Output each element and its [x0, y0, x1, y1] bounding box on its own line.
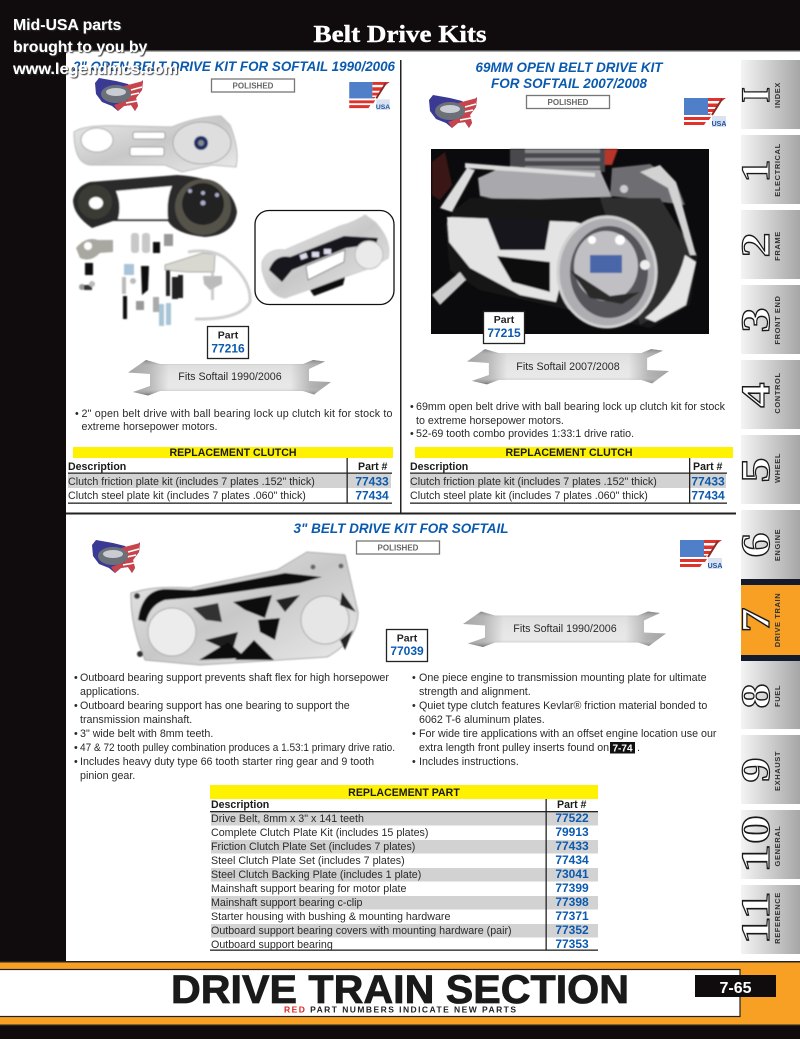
tab: control: 4: [734, 382, 778, 408]
table: replacement clutch: 77434: [355, 488, 389, 502]
panel: 69mm kit: [410, 59, 733, 504]
tab: index: I: [733, 87, 778, 103]
watermark text: [12, 17, 178, 78]
bullet text left: 3" wide belt with 8mm teeth.: [80, 728, 213, 740]
bullet text right: •: [412, 672, 416, 684]
icon: made in usa flag: [684, 98, 726, 128]
bullet text: •: [410, 428, 414, 440]
bullet text right: •: [412, 756, 416, 768]
tab: wheel: WHEEL: [773, 453, 782, 483]
table: replacement part: Outboard support bearing covers with mounting hardware (pair): [211, 925, 512, 937]
table: replacement part: 77399: [555, 881, 589, 895]
icon: usa map: [429, 95, 477, 128]
tab: front end: FRONT END: [773, 295, 782, 345]
footer title: DRIVE TRAIN SECTION: [171, 968, 629, 1012]
bullet text left: applications.: [80, 686, 139, 698]
bullet text left: 47 & 72 tooth pulley combination produces a 1.53:1 primary drive ratio.: [80, 742, 395, 754]
table: replacement part: 77522: [555, 811, 589, 825]
watermark text: brought to you by: [13, 39, 147, 56]
bullet text left: •: [74, 672, 78, 684]
table: replacement clutch: REPLACEMENT CLUTCH: [505, 447, 633, 459]
table: replacement clutch: 77433: [355, 474, 389, 488]
tab: general: GENERAL: [773, 826, 782, 866]
polished label: [356, 541, 440, 554]
table: replacement part: 77352: [555, 923, 589, 937]
tab: exhaust: EXHAUST: [773, 751, 782, 791]
heading: 3 inch kit: 3" BELT DRIVE KIT FOR SOFTAIL: [294, 520, 508, 536]
table: replacement clutch: Part #: [358, 461, 388, 473]
table: replacement part: 77433: [555, 839, 589, 853]
polished label: POLISHED: [378, 544, 419, 552]
table: replacement part: REPLACEMENT PART: [348, 787, 460, 799]
tab: frame: 2: [734, 232, 778, 258]
tab: drive train (active): 7: [734, 607, 778, 633]
table: replacement clutch: Clutch friction plate kit (includes 7 plates .152" thick): [68, 476, 315, 488]
bullet text right: [412, 672, 717, 768]
heading line 2: FOR SOFTAIL 2007/2008: [491, 75, 647, 91]
table: replacement part: Mainshaft support bearing c-clip: [211, 897, 363, 909]
inset photo: assembled cover: [255, 210, 394, 304]
table: replacement part: Outboard support bearing: [211, 939, 333, 951]
tab: fuel: FUEL: [773, 685, 782, 707]
bullet text left: •: [74, 728, 78, 740]
panel: 2 inch kit: [68, 58, 395, 504]
part number box 77215: [484, 312, 524, 344]
tab: drive train (active): [734, 579, 800, 661]
bullet text right: One piece engine to transmission mounting plate for ultimate: [419, 672, 707, 684]
tab: engine: 6: [734, 532, 778, 558]
tab: reference: [734, 885, 800, 954]
table: replacement part: Friction Clutch Plate Set (includes 7 plates): [211, 841, 415, 853]
table: replacement clutch: Description: [68, 461, 126, 473]
part number box 77216: 77216: [211, 342, 245, 356]
footer band: [0, 961, 800, 1026]
bullet text: •: [75, 408, 79, 420]
icon: made in usa flag: [349, 82, 390, 111]
bullet text right: Includes instructions.: [419, 756, 519, 768]
tab: reference: REFERENCE: [773, 892, 782, 944]
bullet text left: Outboard bearing support prevents shaft flex for high horsepower: [80, 672, 389, 684]
wrench: fits softail 1990/2006: Fits Softail 1990/2006: [178, 371, 282, 383]
panel: 3 inch kit: [74, 520, 722, 951]
bullet text left: Outboard bearing support has one bearing to support the: [80, 700, 350, 712]
page number: 7-65: [719, 980, 752, 997]
bullet text: extreme horsepower motors.: [82, 421, 218, 433]
bullet text: 52-69 tooth combo provides 1:33:1 drive ratio.: [416, 428, 634, 440]
polished label: [526, 96, 610, 108]
part number box 77215: Part: [494, 314, 515, 326]
table: replacement part: 73041: [555, 867, 589, 881]
tab: electrical: [735, 135, 800, 204]
table: replacement clutch: Clutch steel plate kit (includes 7 plates .060" thick): [410, 490, 648, 502]
bullet text left: transmission mainshaft.: [80, 714, 192, 726]
table: replacement part: Steel Clutch Backing Plate (includes 1 plate): [211, 869, 421, 881]
watermark text: www.legendmcs.com: [12, 61, 178, 78]
tab: reference: 11: [734, 892, 778, 944]
bullet text left: Includes heavy duty type 66 tooth starter ring gear and 9 tooth: [80, 756, 374, 768]
bullet text right: 7-74: [612, 744, 633, 754]
table: replacement part: Drive Belt, 8mm x 3" x 141 teeth: [211, 813, 364, 825]
polished label: [212, 79, 294, 92]
tab: drive train (active): DRIVE TRAIN: [773, 593, 782, 647]
divider between kits: [400, 60, 402, 514]
part number box 77039: Part: [397, 632, 418, 644]
tab: fuel: [734, 661, 800, 729]
table: replacement part: 79913: [555, 825, 589, 839]
part number box 77215: 77215: [487, 326, 521, 340]
table: replacement part: Description: [211, 799, 269, 811]
tab: frame: FRAME: [773, 231, 782, 261]
bullet text: •: [410, 401, 414, 413]
tab: frame: [734, 210, 800, 279]
table: replacement part: 77398: [555, 895, 589, 909]
part number box 77039: 77039: [390, 644, 424, 658]
wrench: fits softail 2007/2008: Fits Softail 2007/2008: [516, 361, 620, 373]
part number box 77039: [386, 630, 428, 662]
bullet text right: extra length front pulley inserts found on: [419, 742, 609, 754]
bullet text right: 6062 T-6 aluminum plates.: [419, 714, 545, 726]
table: replacement part: 77353: [555, 937, 589, 951]
icon: made in usa flag: [680, 540, 722, 570]
bullet text right: •: [412, 700, 416, 712]
section divider: [66, 512, 736, 514]
table: replacement part: 77371: [555, 909, 589, 923]
table: replacement clutch: Clutch steel plate kit (includes 7 plates .060" thick): [68, 490, 306, 502]
bullet text right: For wide tire applications with an offset engine location use our: [419, 728, 717, 740]
polished label: POLISHED: [233, 82, 274, 90]
tab: electrical: 1: [735, 160, 778, 182]
table: replacement clutch: Part #: [693, 461, 723, 473]
tab: index: INDEX: [773, 82, 782, 108]
polished label: POLISHED: [548, 98, 589, 107]
photo: belt drive kit components: [73, 116, 250, 326]
watermark text: Mid-USA parts: [13, 17, 121, 34]
bullet text left: •: [74, 742, 78, 754]
tab: control: CONTROL: [773, 372, 782, 414]
wrench: fits softail 1990/2006: [463, 612, 666, 647]
table: replacement part: [210, 785, 598, 951]
icon: usa map: [92, 540, 140, 573]
section tabs: [733, 60, 800, 954]
table: replacement clutch: Description: [410, 461, 468, 473]
wrench: fits softail 1990/2006: [128, 360, 331, 396]
table: replacement clutch: 77434: [691, 488, 725, 502]
bullet text left: •: [74, 756, 78, 768]
tab: general: 10: [734, 815, 778, 873]
bullet text: 69mm open belt drive with ball bearing lock up clutch kit for stock: [416, 401, 726, 413]
table: replacement part: Mainshaft support bearing for motor plate: [211, 883, 407, 895]
heading: 69mm kit: 69MM OPEN BELT DRIVE KIT: [476, 59, 664, 75]
table: replacement clutch: [410, 447, 733, 504]
table: replacement part: Complete Clutch Plate Kit (includes 15 plates): [211, 827, 428, 839]
bullet text left: •: [74, 700, 78, 712]
table: replacement part: Starter housing with bushing & mounting hardware: [211, 911, 450, 923]
tab: engine: [734, 510, 800, 579]
tab: wheel: [734, 435, 800, 504]
bullet text: 2" open belt drive with ball bearing lock up clutch kit for stock to: [82, 408, 393, 420]
photo: installed belt drive: [431, 149, 709, 334]
bullet text right: strength and alignment.: [419, 686, 531, 698]
tab: front end: [734, 285, 800, 354]
tab: electrical: ELECTRICAL: [773, 143, 782, 197]
tab: fuel: 8: [734, 683, 778, 709]
bullet text: [410, 401, 726, 440]
table: replacement clutch: Clutch friction plate kit (includes 7 plates .152" thick): [410, 476, 657, 488]
bullet text right: Quiet type clutch features Kevlar® friction material bonded to: [419, 700, 707, 712]
tab: index: [733, 60, 800, 129]
bullet text: [75, 408, 393, 433]
tab: exhaust: [734, 735, 800, 804]
wrench: fits softail 2007/2008: [467, 349, 669, 384]
part number box 77216: Part: [218, 330, 239, 342]
bullet text left: pinion gear.: [80, 770, 135, 782]
tab: front end: 3: [734, 307, 778, 333]
page number: [695, 975, 776, 997]
footer note: RED PART NUMBERS INDICATE NEW PARTS: [284, 1004, 516, 1014]
table: replacement clutch: [68, 447, 393, 504]
table: replacement clutch: REPLACEMENT CLUTCH: [169, 447, 297, 459]
bullet text right: •: [412, 728, 416, 740]
bullet text right: .: [637, 742, 640, 754]
table: replacement part: Part #: [557, 799, 587, 811]
tab: control: [734, 360, 800, 429]
icon: usa map: [95, 78, 143, 111]
tab: exhaust: 9: [734, 757, 778, 783]
part number box 77216: [208, 326, 248, 358]
table: replacement part: Steel Clutch Plate Set (includes 7 plates): [211, 855, 405, 867]
bullet text left: [74, 672, 395, 782]
tab: general: [734, 810, 800, 879]
tab: engine: ENGINE: [773, 529, 782, 561]
photo: 3 inch belt cover: [131, 552, 358, 665]
tab: wheel: 5: [734, 457, 778, 483]
bullet text: to extreme horsepower motors.: [416, 415, 564, 427]
wrench: fits softail 1990/2006: Fits Softail 1990/2006: [513, 623, 617, 635]
table: replacement clutch: 77433: [691, 474, 725, 488]
table: replacement part: 77434: [555, 853, 589, 867]
heading: 2 inch kit: 2" OPEN BELT DRIVE KIT FOR SOFTAIL 1990/2006: [72, 58, 395, 74]
page title: Belt Drive Kits: [314, 21, 486, 48]
